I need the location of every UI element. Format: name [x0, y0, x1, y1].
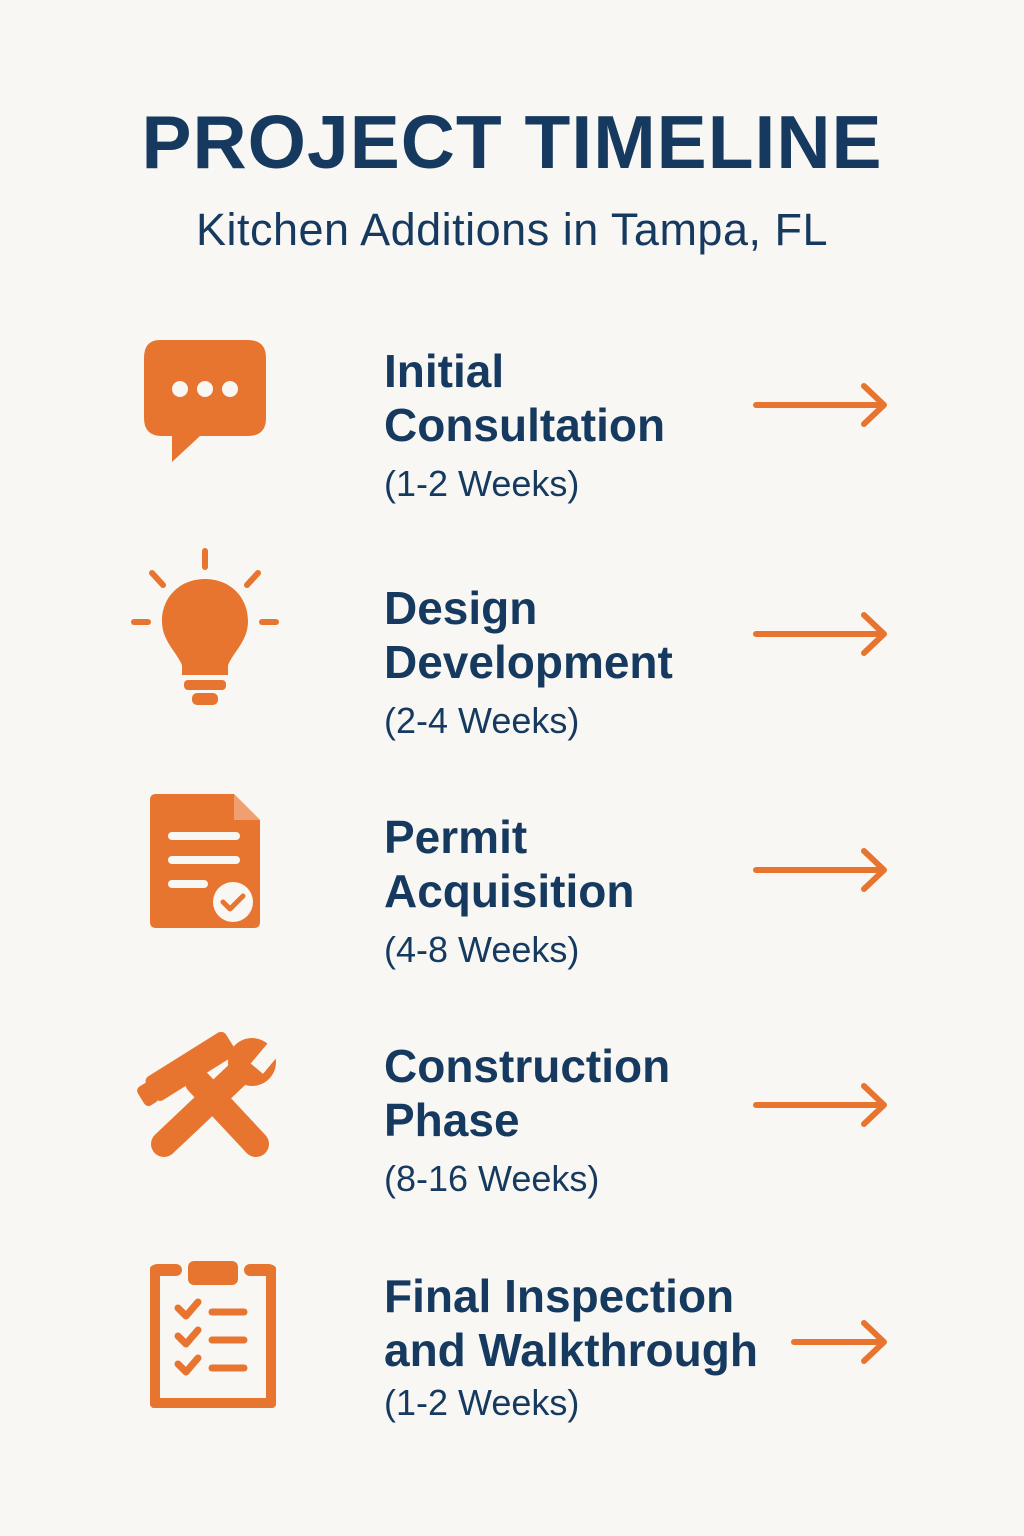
step 5 text: Final Inspection: [384, 1270, 734, 1322]
step 4 text: [384, 1040, 670, 1199]
step 3 text: Permit: [384, 811, 527, 863]
step 5 text: and Walkthrough: [384, 1324, 758, 1376]
step 2 text: Design: [384, 582, 537, 634]
step 4 text: Construction: [384, 1040, 670, 1092]
step 3 text: (4-8 Weeks): [384, 929, 579, 970]
step 4 text: Phase: [384, 1094, 520, 1146]
icon: clipboard checklist: [150, 1261, 276, 1408]
icon: document: [150, 794, 260, 928]
arrow 3: [753, 848, 887, 892]
step 3 text: [384, 811, 634, 970]
step 1 text: [384, 345, 665, 504]
step 2 text: (2-4 Weeks): [384, 700, 579, 741]
icon: chat bubble: [144, 340, 266, 462]
arrow 5: [791, 1320, 887, 1364]
subtitle: Kitchen Additions in Tampa, FL: [196, 204, 828, 255]
icon: hammer and wrench: [137, 1032, 276, 1157]
step 4 text: (8-16 Weeks): [384, 1158, 599, 1199]
step 1 text: Initial: [384, 345, 504, 397]
step 2 text: Development: [384, 636, 673, 688]
step 5 text: (1-2 Weeks): [384, 1382, 579, 1423]
icon: lightbulb: [131, 548, 279, 705]
arrow 1: [753, 383, 887, 427]
arrow 4: [753, 1083, 887, 1127]
step 1 text: (1-2 Weeks): [384, 463, 579, 504]
title: PROJECT TIMELINE: [141, 100, 883, 184]
arrow 2: [753, 612, 887, 656]
step 2 text: [384, 582, 673, 741]
step 3 text: Acquisition: [384, 865, 634, 917]
step 1 text: Consultation: [384, 399, 665, 451]
step 5 text: [384, 1270, 758, 1423]
